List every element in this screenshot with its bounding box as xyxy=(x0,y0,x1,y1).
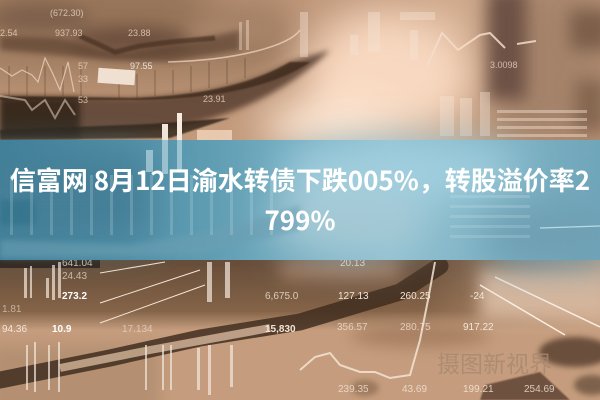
figures: 917.22 xyxy=(463,322,494,333)
figures: 6,675.0 xyxy=(265,291,299,302)
figures: 24.43 xyxy=(62,271,87,282)
white vertical bars xyxy=(24,262,233,395)
figures: 94.36 xyxy=(2,324,27,335)
bar charts xyxy=(239,12,490,136)
small figures: 53 xyxy=(78,95,88,105)
teal band texture xyxy=(0,140,600,265)
white label strip xyxy=(97,68,135,85)
figures: 641.04 xyxy=(62,258,93,269)
figures: 43.69 xyxy=(402,384,427,395)
white trend lines xyxy=(100,262,205,323)
figures xyxy=(2,258,555,395)
figures: 17.134 xyxy=(122,324,153,335)
small figures: 97.55 xyxy=(130,61,153,71)
small figures: (672.30) xyxy=(50,8,84,18)
diagonal banknote band xyxy=(0,266,440,380)
figures: 273.2 xyxy=(62,291,87,302)
figures: 1.81 xyxy=(2,304,22,315)
small figures: 2.54 xyxy=(0,28,18,38)
white line charts xyxy=(0,58,74,92)
title line 1: 信富网 8月12日渝水转债下跌005%，转股溢价率2 xyxy=(10,161,590,198)
top photo tones xyxy=(0,0,600,150)
figures: 20.13 xyxy=(340,258,365,269)
figures: 127.13 xyxy=(338,291,369,302)
small figures: 23.88 xyxy=(128,28,151,38)
rib texture xyxy=(8,58,246,98)
small figures: 57 xyxy=(78,61,88,71)
figures: 239.35 xyxy=(338,384,369,395)
figures: 199.21 xyxy=(463,384,494,395)
bottom photo tones xyxy=(0,255,600,400)
figures: -24 xyxy=(470,291,485,302)
table of figures xyxy=(497,110,587,137)
small figures xyxy=(0,8,518,105)
watermark: 摄图新视界 xyxy=(437,345,552,379)
small figures: 937.93 xyxy=(55,28,83,38)
figures: 15,830 xyxy=(265,324,296,335)
figures: 10.9 xyxy=(52,324,72,335)
small figures: 33 xyxy=(78,74,88,84)
small figures: 23.91 xyxy=(203,94,226,104)
notes lower right xyxy=(480,372,570,400)
figures: 280.75 xyxy=(400,322,431,333)
light bars xyxy=(162,124,168,144)
title line 2: 799% xyxy=(264,201,336,238)
figures: 254.69 xyxy=(524,384,555,395)
figures: 260.25 xyxy=(400,291,431,302)
curved banknote band xyxy=(0,30,240,62)
figures: 356.57 xyxy=(337,322,368,333)
small figures: 3.0098 xyxy=(490,60,518,70)
